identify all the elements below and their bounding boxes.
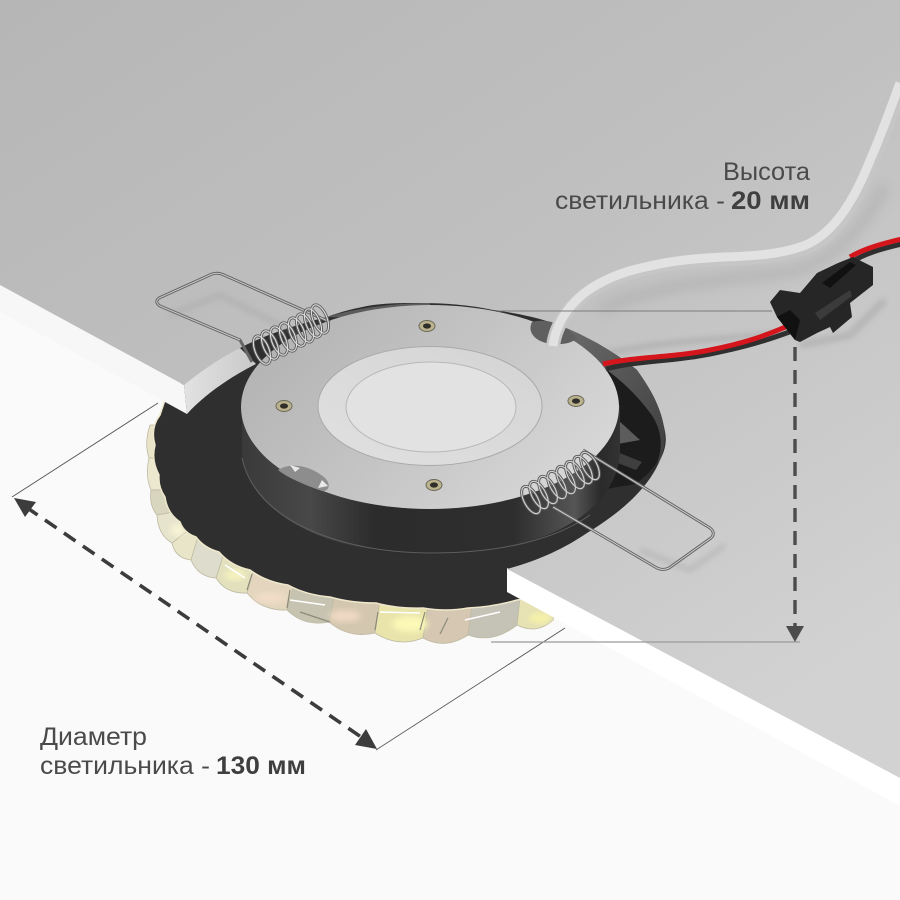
red and black wires	[603, 239, 900, 369]
thin dimension lines	[12, 311, 800, 750]
label: diameter: светильника -	[40, 752, 210, 780]
silver top plate	[241, 305, 619, 509]
label: height: 20 мм	[731, 187, 810, 215]
inner disc	[318, 346, 542, 466]
side notch with reflection	[278, 465, 329, 491]
label: height: светильника -	[555, 187, 725, 215]
label: diameter	[40, 723, 306, 780]
cut-out face of panel	[184, 348, 256, 414]
label: height: Высота	[723, 158, 810, 186]
luminaire body wall	[242, 405, 620, 555]
label: height	[555, 158, 810, 215]
black flange	[153, 285, 700, 610]
label: diameter: Диаметр	[40, 723, 147, 751]
right spring clip	[518, 449, 713, 570]
left spring clip	[157, 273, 332, 367]
height dashed arrow	[786, 347, 804, 642]
diameter dashed arrow	[14, 498, 377, 749]
screws	[276, 320, 584, 490]
white cable	[553, 83, 900, 346]
flange inner wall, right side	[327, 303, 665, 490]
connector	[770, 257, 873, 342]
front white edge of panel	[0, 285, 900, 806]
wire entry notch	[530, 321, 577, 344]
label: diameter: 130 мм	[216, 752, 306, 780]
shadows on panel	[170, 185, 885, 570]
lens ring with scalloped edge	[147, 425, 560, 643]
lens highlights	[171, 524, 551, 634]
